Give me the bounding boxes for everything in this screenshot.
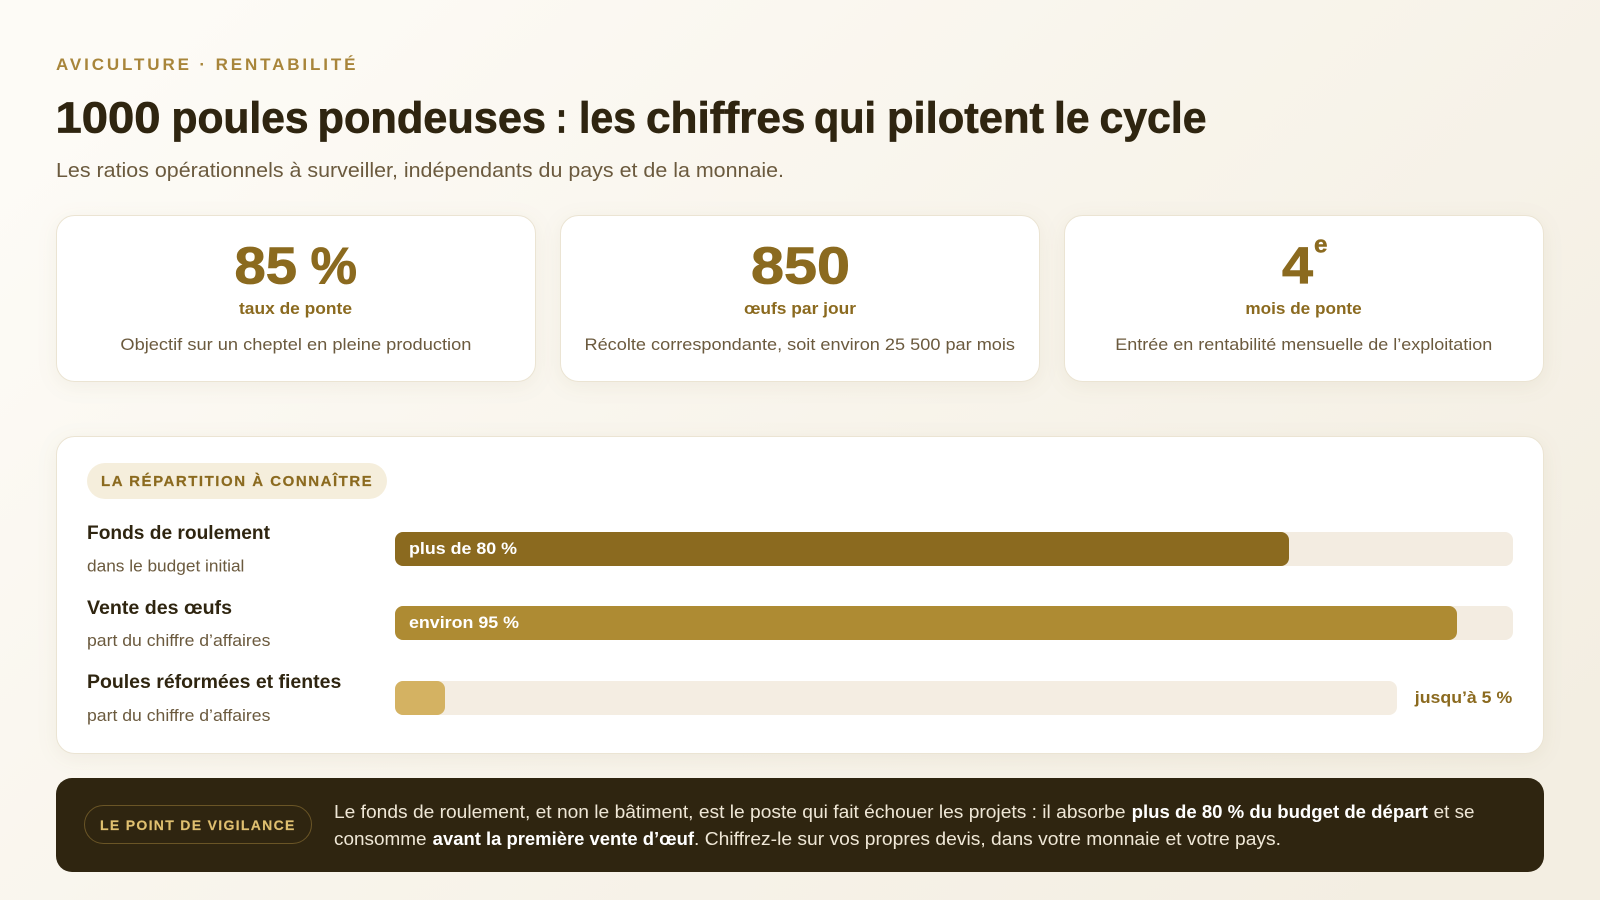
row: poules réformées et fientes: part du chiffre d’affaires [87,707,270,725]
callout text: consomme [334,829,426,849]
KPI value 4e: 4 [1282,238,1313,296]
title: le [1054,94,1090,143]
title: cycle [1100,94,1206,143]
callout text: avant la première vente d’œuf [433,829,695,849]
KPI label: mois de ponte [1245,299,1362,318]
KPI description: Objectif sur un cheptel en pleine production [120,335,471,354]
chip: LE POINT DE VIGILANCE [100,817,294,833]
row: poules réformées et fientes: jusqu’à 5 % [1414,688,1512,707]
KPI value 850: 850 [751,238,850,296]
title: pilotent [887,94,1044,143]
row: poules réformées et fientes [87,671,1512,725]
title: : [556,94,567,143]
row: vente des oeufs: environ 95 % [409,613,519,632]
callout text [334,802,1474,849]
title: chiffres [646,94,806,143]
section pill: LA RÉPARTITION À CONNAÎTRE [101,472,372,490]
title: poules [172,94,308,143]
subtitle: Les ratios opérationnels à surveiller, indépendants du pays et de la monnaie. [56,159,784,182]
panel: KPI oeufs par jour [560,216,1040,382]
KPI label: taux de ponte [239,299,352,318]
header [56,55,1206,182]
row: fonds de roulement [87,522,1513,576]
row: vente des oeufs [87,597,1513,650]
KPI value 4e [1282,232,1328,296]
panel: répartition [56,436,1544,754]
callout text: Le fonds de roulement, et non le bâtiment, est le poste qui fait échouer les projets : il absorbe [334,802,1126,822]
row: vente des oeufs: Vente des œufs [87,597,232,619]
row: fonds de roulement: dans le budget initial [87,558,244,576]
KPI description: Entrée en rentabilité mensuelle de l’exploitation [1115,335,1492,354]
KPI value 85 %: 85 [234,238,297,296]
KPI label: œufs par jour [744,299,856,318]
row: fonds de roulement: Fonds de roulement [87,522,270,544]
panel: KPI mois de ponte [1064,216,1544,382]
callout text: et se [1434,802,1474,822]
KPI value 4e: e [1314,232,1328,259]
title: 1000 [56,94,160,143]
title: pondeuses [318,94,546,143]
title: qui [814,94,876,143]
row: vente des oeufs: part du chiffre d’affaires [87,632,270,650]
KPI value 85 %: % [310,238,357,296]
chip [84,806,312,844]
section pill [87,463,387,499]
KPI description: Récolte correspondante, soit environ 25 500 par mois [584,335,1015,354]
callout text: . Chiffrez-le sur vos propres devis, dans votre monnaie et votre pays. [694,829,1281,849]
title: les [579,94,636,143]
title [56,94,1206,143]
KPI value 85 % [234,238,357,296]
panel: KPI taux de ponte [56,216,536,382]
eyebrow: AVICULTURE · RENTABILITÉ [56,55,356,74]
row: poules réformées et fientes: Poules réformées et fientes [87,671,341,693]
callout text: plus de 80 % du budget de départ [1132,802,1428,822]
row: fonds de roulement: plus de 80 % [409,539,517,558]
callout: point de vigilance [56,778,1544,872]
